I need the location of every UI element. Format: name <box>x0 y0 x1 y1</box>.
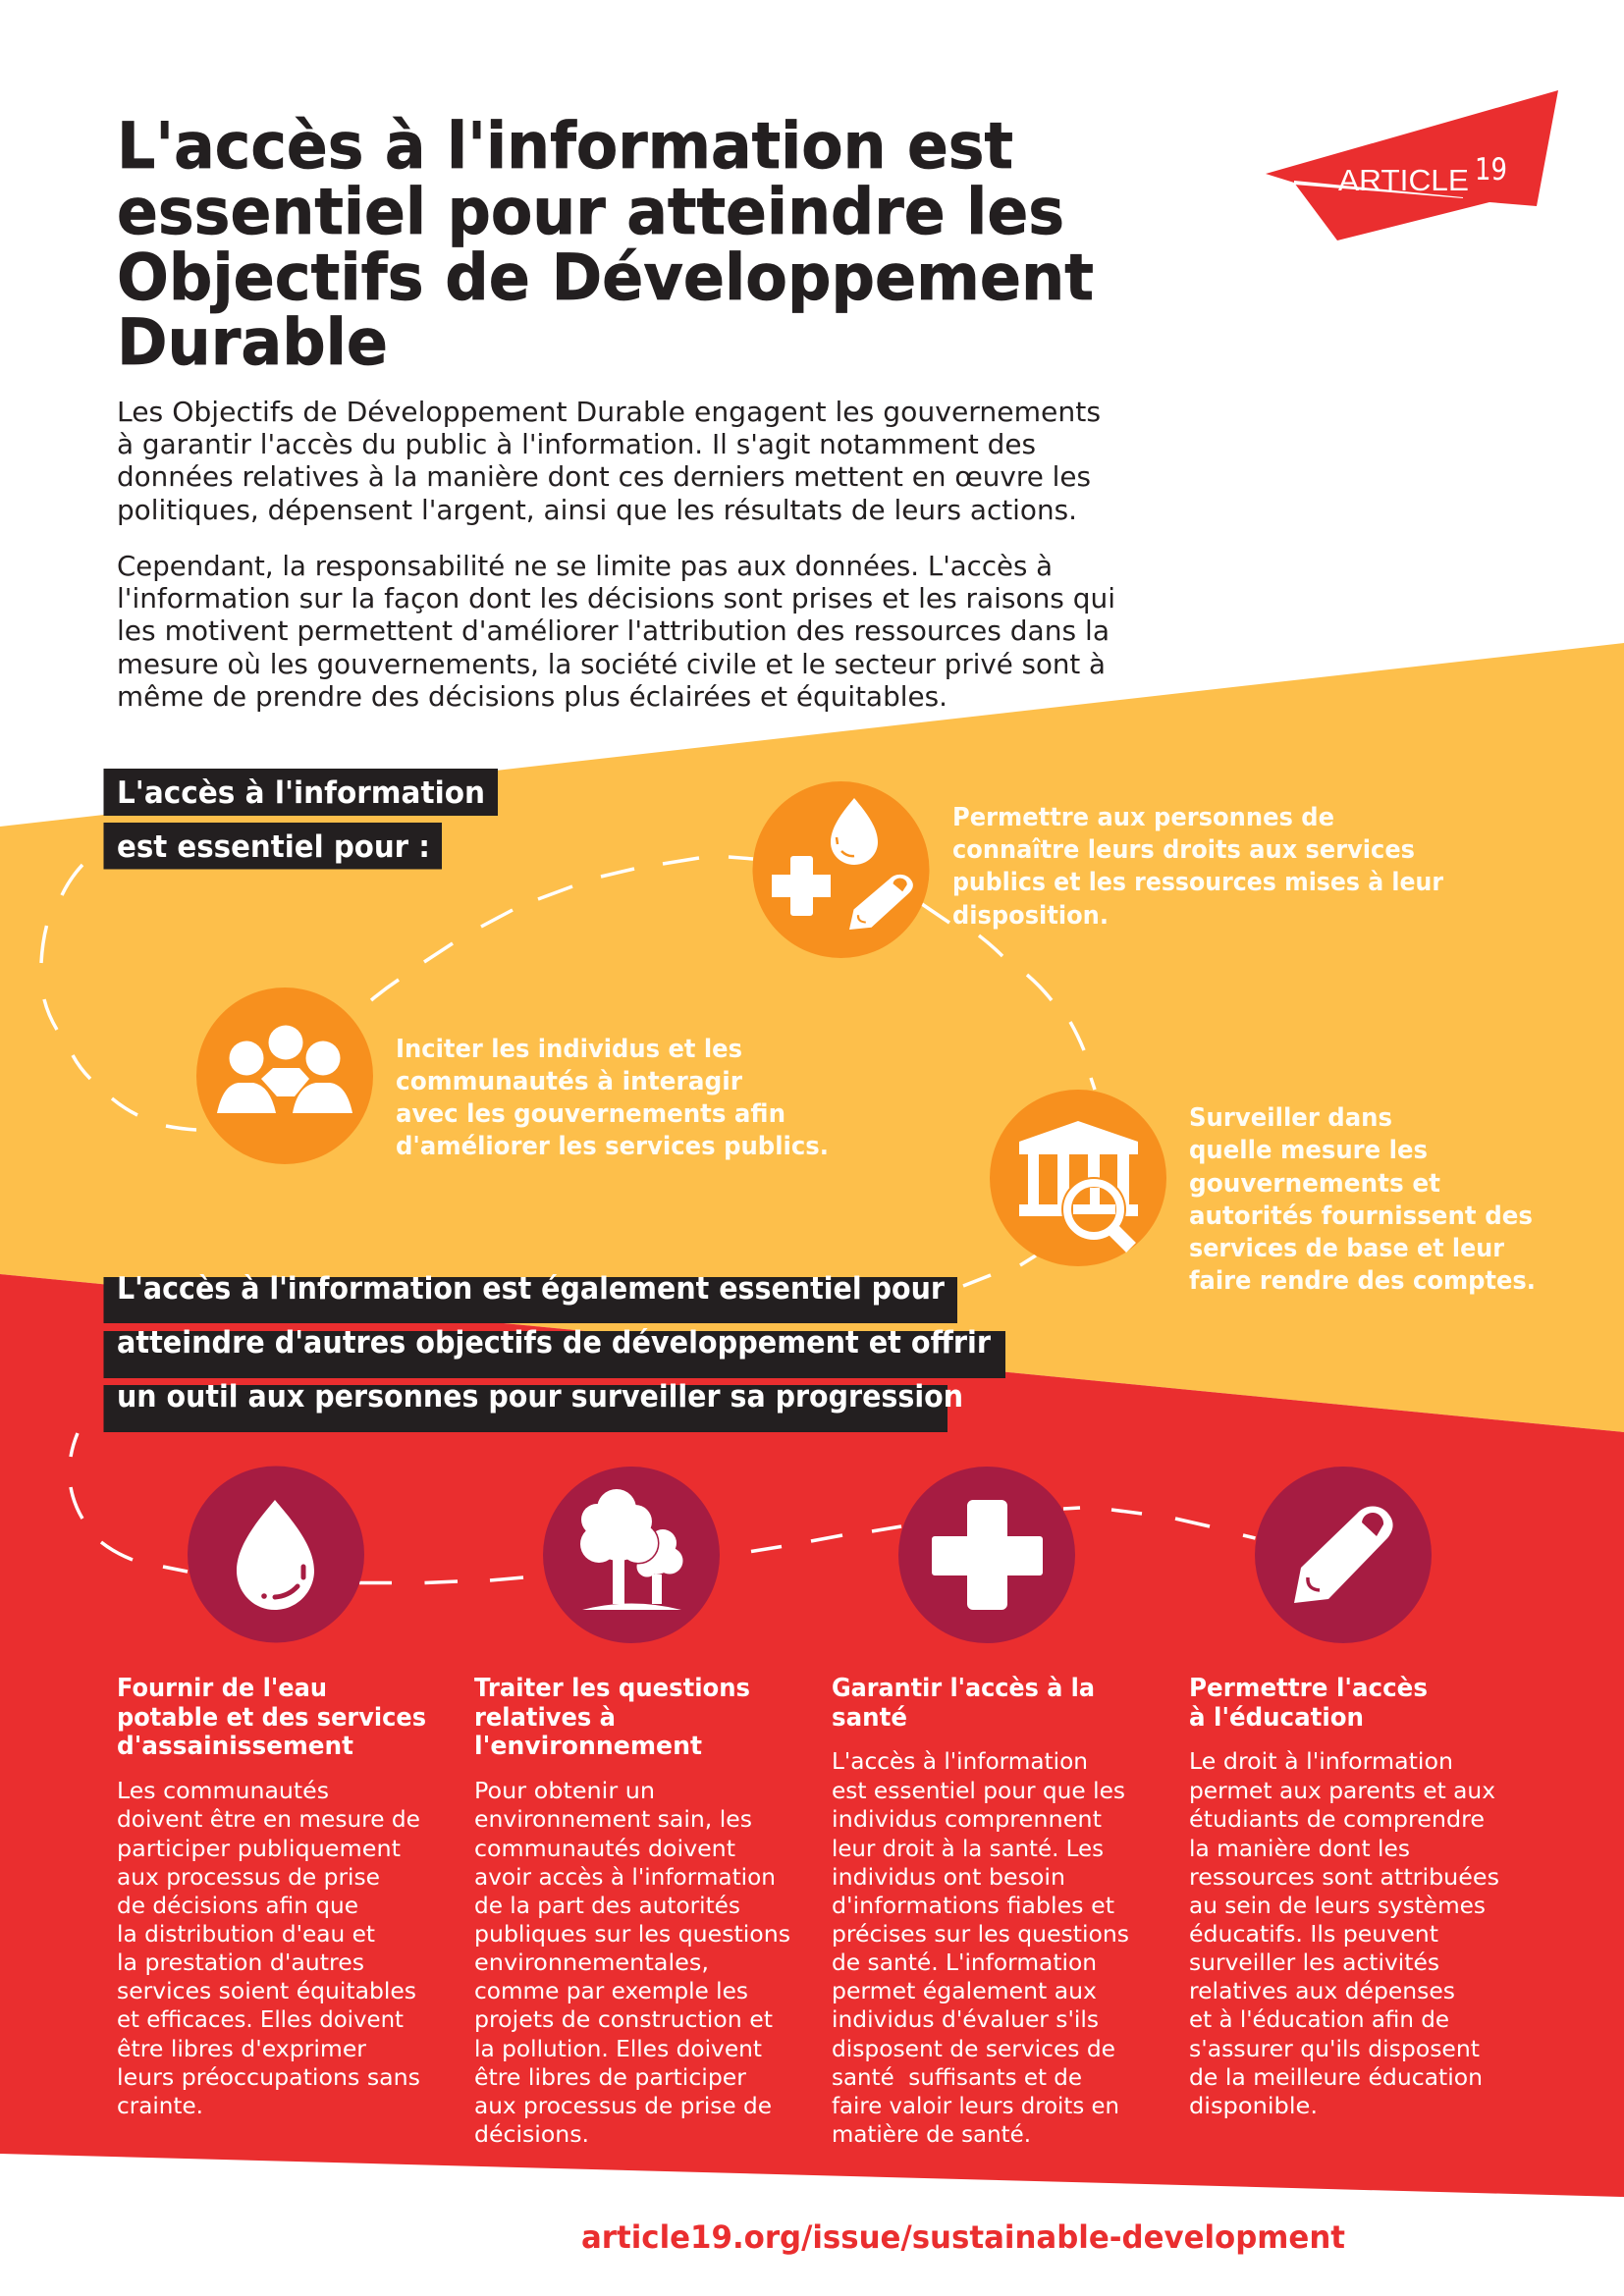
label: également essentiel: L'accès à l'information est également essentiel pour <box>117 1271 946 1307</box>
body: éducation: permet aux parents et aux <box>1189 1777 1495 1804</box>
heading: eau: potable et des services <box>117 1703 426 1733</box>
body: santé: matière de santé. <box>832 2120 1031 2148</box>
heading: santé: Garantir l'accès à la <box>832 1674 1095 1703</box>
body: éducation: ressources sont attribuées <box>1189 1863 1499 1891</box>
body: éducation: au sein de leurs systèmes <box>1189 1892 1486 1919</box>
title: essentiel pour atteindre les <box>117 176 1064 249</box>
text: connaître leurs droits: disposition. <box>952 901 1109 931</box>
dashed path: red section <box>71 1433 1255 1582</box>
logo: ARTICLE 19 <box>1266 90 1558 240</box>
text: surveiller les gouvernements: gouvernements et <box>1189 1169 1440 1199</box>
body: eau: doivent être en mesure de <box>117 1805 420 1833</box>
body: santé: santé suffisants et de <box>832 2063 1082 2091</box>
body: éducation: et à l'éducation afin de <box>1189 2005 1449 2033</box>
body: éducation: de la meilleure éducation <box>1189 2063 1483 2091</box>
title: Objectifs de Développement <box>117 241 1094 315</box>
title <box>117 110 1094 380</box>
body: environnement: aux processus de prise de <box>474 2092 772 2119</box>
body: eau: et efficaces. Elles doivent <box>117 2005 404 2033</box>
heading: santé <box>832 1674 1095 1733</box>
intro paragraph 2 <box>117 551 1115 713</box>
text: surveiller les gouvernements: services de base et leur <box>1189 1234 1504 1263</box>
intro paragraph 2: l'information sur la façon dont les décisions sont prises et les raisons qui <box>117 583 1115 614</box>
body: eau <box>117 1777 420 2119</box>
body: eau: participer publiquement <box>117 1835 401 1862</box>
text: surveiller les gouvernements: quelle mesure les <box>1189 1136 1428 1165</box>
dashed path: yellow section <box>41 857 1095 1286</box>
body: santé: individus d'évaluer s'ils <box>832 2005 1099 2033</box>
label: L'accès à l'information est essentiel pour: L'accès à l'information <box>117 775 485 811</box>
body: environnement: projets de construction et <box>474 2005 773 2033</box>
body: éducation: surveiller les activités <box>1189 1949 1439 1976</box>
text: interagir avec les gouvernements: d'améliorer les services publics. <box>396 1132 829 1161</box>
body: eau: être libres d'exprimer <box>117 2035 366 2062</box>
body: santé: de santé. L'information <box>832 1949 1097 1976</box>
body: santé: disposent de services de <box>832 2035 1115 2062</box>
intro paragraph 1: à garantir l'accès du public à l'information. Il s'agit notamment des <box>117 429 1036 460</box>
body: santé: précises sur les questions <box>832 1920 1129 1948</box>
body: éducation: étudiants de comprendre <box>1189 1805 1485 1833</box>
body: environnement: environnement sain, les <box>474 1805 752 1833</box>
heading: santé: santé <box>832 1703 907 1733</box>
body: environnement: Pour obtenir un <box>474 1777 655 1804</box>
label: également essentiel: un outil aux personnes pour surveiller sa progression <box>117 1379 963 1415</box>
body: santé <box>832 1747 1129 2148</box>
intro paragraph 2: les motivent permettent d'améliorer l'attribution des ressources dans la <box>117 615 1110 647</box>
intro paragraph 2: Cependant, la responsabilité ne se limite pas aux données. L'accès à <box>117 551 1053 582</box>
text: connaître leurs droits: publics et les ressources mises à leur <box>952 868 1443 897</box>
body: environnement: être libres de participer <box>474 2063 746 2091</box>
body: santé: individus ont besoin <box>832 1863 1065 1891</box>
column: environnement <box>474 1674 790 2148</box>
body: eau: aux processus de prise <box>117 1863 380 1891</box>
body: environnement: la pollution. Elles doivent <box>474 2035 762 2062</box>
body: eau: crainte. <box>117 2092 203 2119</box>
body: eau: la prestation d'autres <box>117 1949 364 1976</box>
icon circle: water drop <box>188 1467 364 1643</box>
body: santé: L'accès à l'information <box>832 1747 1088 1775</box>
body: éducation <box>1189 1747 1499 2119</box>
icon circle: medical cross <box>898 1467 1075 1643</box>
background band: red <box>0 1274 1624 2197</box>
label: L'accès à l'information est essentiel pour: est essentiel pour : <box>117 829 430 865</box>
body: environnement: comme par exemple les <box>474 1977 748 2004</box>
intro paragraph 1: politiques, dépensent l'argent, ainsi que les résultats de leurs actions. <box>117 495 1077 526</box>
body: environnement: publiques sur les questions <box>474 1920 790 1948</box>
text: surveiller les gouvernements: autorités fournissent des <box>1189 1201 1533 1231</box>
text: surveiller les gouvernements: faire rendre des comptes. <box>1189 1266 1536 1296</box>
text: interagir avec les gouvernements: Inciter les individus et les <box>396 1035 742 1064</box>
body: santé: faire valoir leurs droits en <box>832 2092 1119 2119</box>
icon circle: pencil <box>1255 1467 1432 1643</box>
column: éducation <box>1189 1674 1499 2119</box>
body: eau: leurs préoccupations sans <box>117 2063 420 2091</box>
body: eau: la distribution d'eau et <box>117 1920 375 1948</box>
body: environnement: décisions. <box>474 2120 589 2148</box>
heading: environnement: l'environnement <box>474 1732 702 1761</box>
body: environnement: avoir accès à l'information <box>474 1863 776 1891</box>
body: éducation: s'assurer qu'ils disposent <box>1189 2035 1480 2062</box>
intro paragraph 1: données relatives à la manière dont ces derniers mettent en œuvre les <box>117 461 1091 493</box>
heading: éducation: à l'éducation <box>1189 1703 1364 1733</box>
column: eau potable <box>117 1674 426 2119</box>
text: interagir avec les gouvernements: avec les gouvernements afin <box>396 1099 785 1129</box>
icon circle: drop, cross and pencil <box>752 781 929 958</box>
heading: éducation <box>1189 1674 1428 1733</box>
body: santé: individus comprennent <box>832 1805 1102 1833</box>
icon circle: government building with magnifier <box>990 1090 1166 1266</box>
label: L'accès à l'information est essentiel pour <box>104 769 498 870</box>
body: eau: services soient équitables <box>117 1977 416 2004</box>
label: également essentiel <box>104 1271 1005 1432</box>
text: interagir avec les gouvernements <box>396 1035 829 1161</box>
heading: eau: d'assainissement <box>117 1732 353 1761</box>
body: environnement <box>474 1777 790 2148</box>
text: connaître leurs droits: connaître leurs droits aux services <box>952 835 1415 865</box>
heading: eau <box>117 1674 426 1761</box>
title: Durable <box>117 306 388 380</box>
text: surveiller les gouvernements: Surveiller dans <box>1189 1103 1392 1133</box>
intro paragraph 1 <box>117 397 1101 526</box>
label: également essentiel: atteindre d'autres objectifs de développement et offrir <box>117 1325 992 1361</box>
body: environnement: de la part des autorités <box>474 1892 740 1919</box>
body: eau: Les communautés <box>117 1777 329 1804</box>
body: éducation: disponible. <box>1189 2092 1318 2119</box>
intro paragraph 2: mesure où les gouvernements, la société civile et le secteur privé sont à <box>117 649 1106 680</box>
heading: environnement <box>474 1674 750 1761</box>
icon circle: trees <box>543 1467 720 1643</box>
body: éducation: Le droit à l'information <box>1189 1747 1453 1775</box>
heading: eau: Fournir de l'eau <box>117 1674 327 1703</box>
body: environnement: communautés doivent <box>474 1835 735 1862</box>
intro paragraph 2: même de prendre des décisions plus éclairées et équitables. <box>117 681 947 713</box>
body: santé: permet également aux <box>832 1977 1097 2004</box>
heading: environnement: relatives à <box>474 1703 616 1733</box>
body: eau: de décisions afin que <box>117 1892 358 1919</box>
body: éducation: la manière dont les <box>1189 1835 1410 1862</box>
intro paragraph 1: Les Objectifs de Développement Durable engagent les gouvernements <box>117 397 1101 428</box>
column: santé <box>832 1674 1129 2148</box>
body: éducation: relatives aux dépenses <box>1189 1977 1455 2004</box>
body: santé: leur droit à la santé. Les <box>832 1835 1104 1862</box>
heading: environnement: Traiter les questions <box>474 1674 750 1703</box>
icon circle: people <box>196 988 373 1164</box>
background band: yellow <box>0 643 1624 1432</box>
body: éducation: éducatifs. Ils peuvent <box>1189 1920 1438 1948</box>
text: connaître leurs droits <box>952 803 1443 931</box>
heading: éducation: Permettre l'accès <box>1189 1674 1428 1703</box>
title: L'accès à l'information est <box>117 110 1013 184</box>
body: santé: est essentiel pour que les <box>832 1777 1125 1804</box>
text: surveiller les gouvernements <box>1189 1103 1536 1296</box>
footer link: article19.org/issue/sustainable-development <box>581 2218 1345 2256</box>
text: interagir avec les gouvernements: communautés à interagir <box>396 1067 742 1096</box>
body: santé: d'informations fiables et <box>832 1892 1114 1919</box>
logo: ARTICLE 19: 19 <box>1475 152 1507 187</box>
text: connaître leurs droits: Permettre aux personnes de <box>952 803 1334 832</box>
logo: ARTICLE 19: ARTICLE <box>1338 163 1469 197</box>
body: environnement: environnementales, <box>474 1949 709 1976</box>
